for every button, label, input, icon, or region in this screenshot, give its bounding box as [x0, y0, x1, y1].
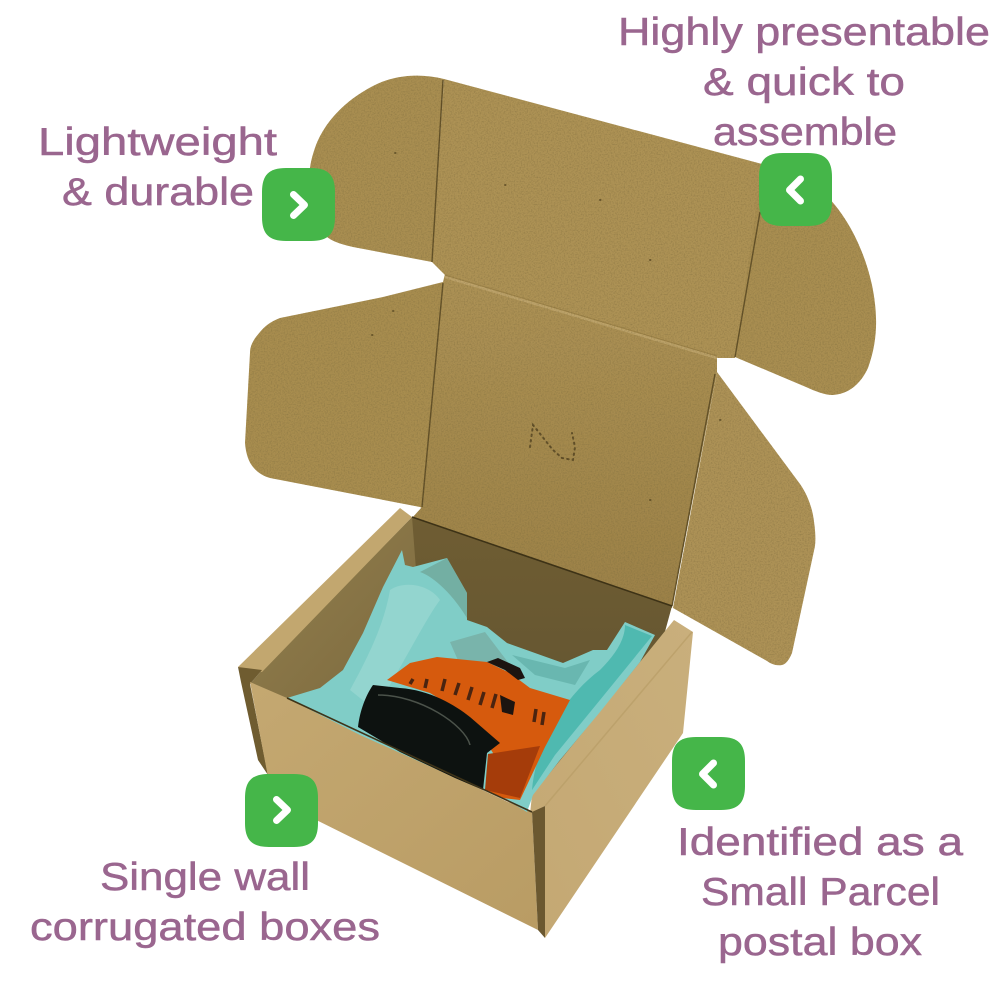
box body [238, 508, 693, 938]
front rim line [287, 698, 532, 812]
left rim [238, 508, 412, 672]
flap: lower right [673, 372, 815, 665]
tissue paper [287, 550, 655, 812]
flap: lower left [245, 282, 443, 510]
left side seam [238, 667, 268, 775]
back inner wall [300, 517, 672, 800]
icon: chevron right, single wall [245, 774, 318, 847]
callout: single wall corrugated [30, 856, 380, 949]
callout: highly presentable: Highly presentable [618, 11, 990, 54]
lid panel: lower [412, 274, 717, 608]
icon: chevron left, presentable [759, 153, 832, 226]
open lid with flaps [245, 76, 876, 665]
watch buckle [487, 658, 525, 680]
right rim edge [545, 632, 692, 806]
callout: lightweight and durable: & durable [62, 171, 254, 214]
callout: small parcel postal box: Small Parcel [701, 871, 940, 914]
flap: upper right ear [735, 164, 876, 395]
callout: lightweight and durable [38, 121, 277, 214]
icon: chevron left, small parcel [672, 737, 745, 810]
watch band [387, 657, 570, 800]
left inner wall [250, 517, 416, 700]
front face [250, 682, 538, 930]
lid panel: top [432, 79, 762, 358]
callout: highly presentable: assemble [713, 111, 897, 154]
callout: small parcel postal box: Identified as a [677, 821, 963, 864]
callout: small parcel postal box: postal box [718, 921, 923, 964]
cardboard specks [372, 153, 720, 500]
flap: upper left ear [310, 76, 444, 262]
callout: highly presentable: & quick to [703, 61, 905, 104]
callout: highly presentable [618, 11, 990, 154]
icon: chevron right, lightweight [262, 168, 335, 241]
callout: lightweight and durable: Lightweight [38, 121, 277, 164]
watch face [358, 685, 500, 790]
right outer face [530, 620, 693, 938]
callout: single wall corrugated: Single wall [100, 856, 310, 899]
callout: small parcel postal box [677, 821, 963, 964]
watch [358, 657, 570, 800]
corner seam [532, 806, 545, 938]
perforated mark [530, 425, 575, 460]
back edge line [412, 517, 672, 606]
callout: single wall corrugated: corrugated boxes [30, 906, 380, 949]
fold lines [422, 80, 760, 606]
